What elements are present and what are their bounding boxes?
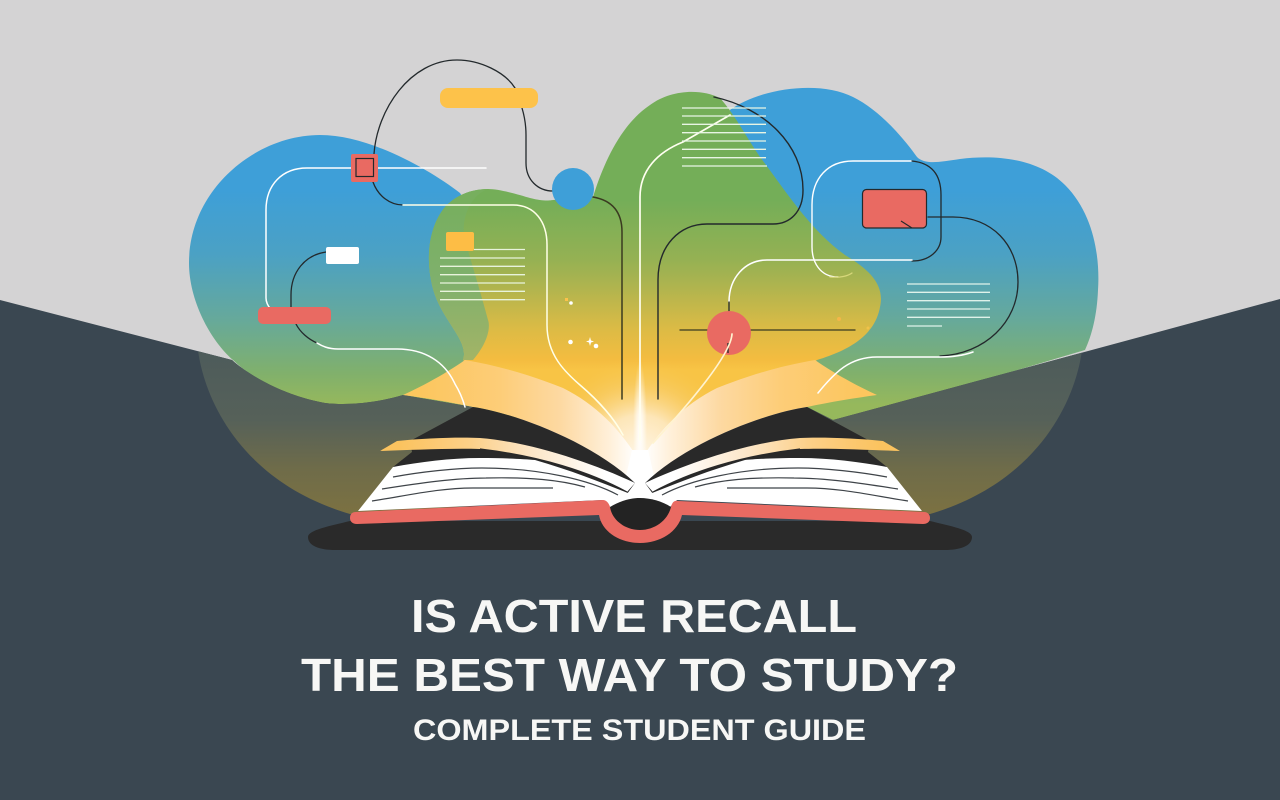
connector lines [266,60,1018,440]
black connector: above red circle [728,302,730,312]
white connector: to red circle [729,260,912,302]
node: red circle [653,311,751,443]
text lines: top document [682,108,767,166]
title [301,590,958,747]
black spine [610,498,671,532]
blob: left blue-green cloud [189,135,560,420]
centre white fill between pages [620,450,660,502]
red book cover [350,500,930,543]
blob: central green-to-yellow cloud [428,92,881,450]
white connector: red bar to book [317,343,465,407]
node: small yellow tag [446,232,474,251]
blob: right blue-green cloud [640,88,1098,425]
black connector: under red square [373,182,403,205]
black connector: loop right side [912,161,941,261]
black connector: white tag arc [291,252,326,307]
page edge lines left [372,449,627,501]
sparkles [565,298,870,348]
white connector: right arc to book [818,352,973,393]
node: yellow bar [440,88,538,108]
white connector: to lower book [403,205,623,435]
left white pages [358,458,642,511]
pale yellow connector: end of loop [830,273,852,277]
black connector: top arc [374,60,553,191]
text lines: right document [907,284,990,326]
book shadow [308,521,972,550]
node: red bar [258,307,331,324]
white connector: loop around red rectangle [812,161,912,277]
black connector: top right arc [658,97,803,399]
subtitle: COMPLETE STUDENT GUIDE [413,714,866,747]
title line 1: IS ACTIVE RECALL [411,590,857,642]
left golden page strip [380,438,635,492]
right white pages [638,458,922,511]
blob: tinted cloud base showing through dark area [197,340,1083,514]
black connector: red bar [296,324,317,343]
central light beam [633,360,647,500]
white connector: left loop [266,168,486,308]
black connector: circle to book [593,197,622,399]
right golden page strip [645,438,900,492]
text lines: left document [440,250,525,300]
black connector: horizontal through circle [680,329,855,331]
node: blue circle [552,168,594,210]
black connector: right big arc [928,217,1018,356]
book: flying left page [403,360,640,492]
right black page [645,407,887,494]
white connector: central rising line [640,115,730,440]
dark lower background [0,299,1280,800]
open book [308,407,972,550]
node: red rectangle [862,190,926,228]
node: red square with black outline [351,154,378,182]
book: flying right page [640,360,877,492]
left black page [393,407,635,494]
title line 2: THE BEST WAY TO STUDY? [301,649,958,701]
node: white tag [326,247,359,264]
page edge lines right [653,449,908,501]
